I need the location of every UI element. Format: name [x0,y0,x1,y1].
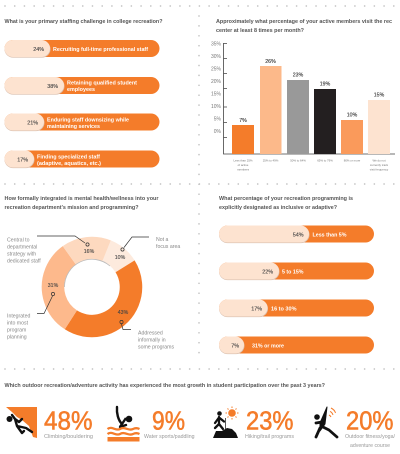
bar: 31% or more: 31% or more [252,344,284,350]
axis labels [211,42,222,135]
bar: do not track: 15% [374,92,385,98]
stat: fitness 20%: 20% [346,406,394,436]
heading: outdoor activity question: Which outdoor recreation/adventure activity has experienced the most growth in student participation over the past 3 years? [4,383,325,389]
label: not a focus area: focus area [156,244,180,250]
icon: water sports [108,407,140,442]
bar: enduring 21% [4,114,160,131]
label: integrated into planning: planning [7,334,27,340]
stat: water sports 9% [144,406,195,440]
bar: less than 5%: 54% [293,232,304,238]
panel: inclusive programming [219,196,374,354]
bar: less than 5% [219,226,374,243]
donut chart [41,236,143,338]
axis labels: 35% [211,42,222,48]
axis labels: 30% [211,54,222,60]
bar: do not track: visit frequency [370,168,389,172]
bar: 25% to 49%: 26% [265,59,276,65]
bar: 50% to 64%: 50% to 64% [290,158,306,162]
data label: 43%: 43% [118,310,129,316]
stat: fitness 20%: adventure course [350,443,390,449]
bar: 31% or more: 7% [231,344,239,350]
leader lines [37,236,149,330]
data label: 10%: 10% [115,255,126,261]
stat: climbing 48%: 48% [44,406,92,436]
bar: 65% to 79% [314,82,336,162]
bar: enduring 21%: Enduring staff downsizing while [47,118,129,124]
panel: outdoor activities [4,383,396,449]
bar: 80% or more: 80% or more [344,158,361,162]
bar: finding 17%: (adaptive, aquatics, etc.) [37,161,101,167]
icon: climbing [6,407,37,438]
icon: fitness [314,407,337,437]
data label: 31%: 31% [48,283,59,289]
label: addressed informally: informally in [138,338,166,344]
bar: recruiting 24%: Recruiting full-time professional staff [53,47,148,53]
label: central to strategy: departmental [7,244,37,250]
data label: 16%: 16% [84,249,95,255]
axis labels: 5% [214,116,222,122]
axis labels: 25% [211,66,222,72]
icon: hiking [213,406,238,438]
bar: less than 25%: 7% [239,118,247,124]
label: addressed informally: Addressed [138,330,163,336]
bar: retaining 38%: employees [67,87,95,93]
label: addressed informally: some programs [138,344,174,350]
bar: recruiting 24%: 24% [33,47,44,53]
label: integrated into planning: program [7,328,26,334]
heading: inclusive programming question: What percentage of your recreation programming is [219,196,353,202]
panel: inclusive programming: explicitly designated as inclusive or adaptive? [219,205,337,211]
bar: 16 to 30%: 17% [251,306,262,312]
bar: recruiting 24% [4,40,160,58]
stat: climbing 48%: Climbing/bouldering [44,434,93,440]
bar: 5 to 15%: 5 to 15% [282,270,304,276]
bar: finding 17%: Finding specialized staff [37,154,100,160]
axis labels: 0% [214,129,222,135]
bar: 5 to 15%: 22% [262,270,273,276]
panel: visit frequency chart [211,19,395,172]
stat: water sports 9%: Water sports/paddling [144,434,195,440]
stat: fitness 20%: Outdoor fitness/yoga/ [345,434,396,440]
bar: less than 25%: members [237,168,250,172]
panel: staffing challenge [4,19,162,168]
stat: fitness 20% [345,406,396,449]
bar: retaining 38%: Retaining qualified student [67,80,137,86]
bar: do not track: currently track [370,163,389,167]
bar: 25% to 49% [260,59,282,162]
bar: enduring 21%: maintaining services [47,124,100,130]
bar: less than 25% [232,118,254,172]
bar: 31% or more [219,336,374,354]
bar: do not track [368,92,390,172]
axis labels: 10% [211,104,222,110]
bar: 5 to 15% [219,262,374,280]
bar: 80% or more: 10% [347,112,358,118]
label: not a focus area: Not a [156,237,169,243]
bar: 25% to 49%: 25% to 49% [263,158,279,162]
label: central to strategy: dedicated staff [7,258,41,264]
heading: staffing question: What is your primary staffing challenge in college recreation? [4,19,162,25]
panel: visit frequency chart: center at least 8 times per month? [216,28,304,34]
bar: retaining 38%: 38% [47,84,58,90]
label: integrated into planning: Integrated [7,314,30,320]
bar: 50% to 64%: 23% [293,72,304,78]
panel: mental health donut: recreation department’s mission and programming? [4,205,138,211]
bar: less than 25%: of active [238,163,249,167]
axis labels: 20% [211,79,222,85]
panel: mental health donut [4,196,180,350]
bar: less than 25%: Less than 25% [233,158,253,162]
heading: visit frequency question: Approximately what percentage of your active members visit the rec [216,19,392,25]
stat: hiking 23%: Hiking/trail programs [245,434,295,440]
bar: finding 17%: 17% [17,158,28,164]
stat: water sports 9%: 9% [152,406,185,436]
bar: 65% to 79%: 19% [320,82,331,88]
bar: 50% to 64% [287,72,309,162]
bar: 16 to 30%: 16 to 30% [271,306,297,312]
bar: finding 17% [4,150,160,168]
label: integrated into planning: into most [7,320,29,326]
stat: hiking 23%: 23% [246,406,294,436]
axis labels: 15% [211,92,222,98]
bar: retaining 38% [4,77,160,95]
bar: enduring 21%: 21% [27,120,38,126]
bar: 16 to 30% [219,300,374,317]
bar: 80% or more [341,112,363,162]
label: central to strategy: Central to [7,238,30,244]
bar: 65% to 79%: 65% to 79% [317,158,333,162]
label: central to strategy: strategy with [7,252,36,258]
bar: less than 5%: Less than 5% [312,232,347,238]
bar: do not track: We do not [372,158,386,162]
heading: mental health question: How formally integrated is mental health/wellness into your [4,196,159,202]
